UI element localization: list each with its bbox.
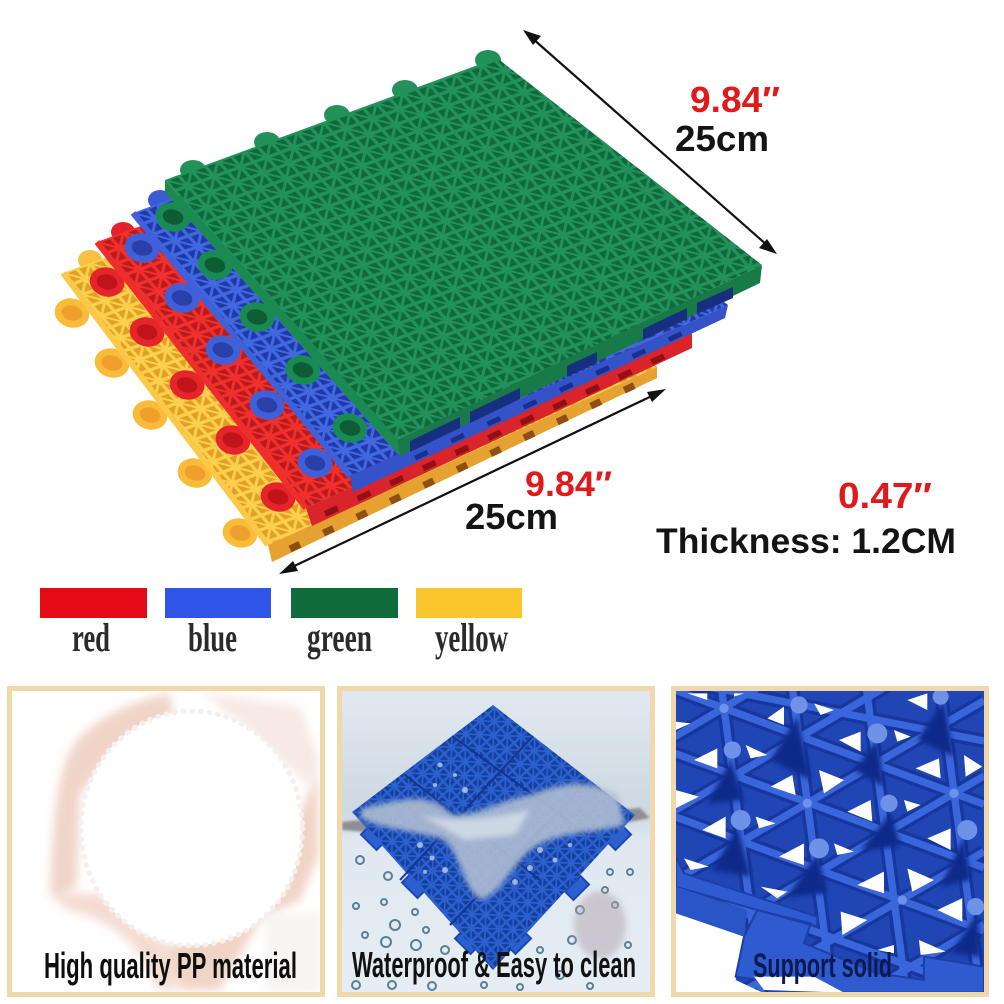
swatch: blue: blue [188, 615, 237, 660]
post caps [719, 689, 984, 915]
caption: Waterproof & Easy to clean [352, 944, 636, 985]
arrow: bottom width dimension [279, 389, 666, 574]
swatch: green [291, 588, 398, 660]
swatch: red [40, 588, 147, 660]
panel: waterproof [340, 688, 652, 994]
image: close-up of tile lattice [674, 680, 984, 993]
panel: PP material [10, 688, 322, 994]
label: thickness: Thickness: 1.2CM [656, 522, 956, 561]
product photo: stacked tiles [56, 50, 762, 562]
connector loop [676, 857, 984, 993]
swatch: yellow [416, 588, 522, 660]
image: tile under water splash [342, 705, 650, 990]
green tile [157, 50, 762, 456]
label: bottom dimension: 9.84″ [525, 465, 612, 504]
label: top dimension [675, 79, 780, 159]
caption: Support solid [753, 947, 892, 985]
swatch: blue [165, 588, 271, 660]
label: bottom dimension [465, 465, 612, 537]
panel: support structure [674, 680, 986, 994]
ribs shadow [674, 680, 984, 993]
label: bottom dimension: 25cm [465, 496, 558, 537]
label: top dimension: 25cm [675, 118, 769, 159]
yellow tile [56, 150, 657, 562]
colour legend [40, 588, 522, 660]
image: hands holding pellets [50, 693, 322, 992]
label: thickness [656, 475, 956, 561]
swatch: red: red [72, 615, 110, 660]
dark support wells [707, 700, 981, 957]
swatch: yellow: yellow [435, 615, 508, 660]
red tile [91, 120, 692, 526]
label: top dimension: 9.84″ [690, 79, 780, 120]
arrow: top width dimension [523, 30, 777, 254]
ribs [674, 680, 984, 993]
blue tile [126, 90, 728, 492]
label: thickness: 0.47″ [838, 475, 932, 516]
triangular holes [674, 693, 982, 993]
caption: High quality PP material [44, 945, 297, 986]
bubbles [352, 856, 633, 990]
swatch: green: green [307, 615, 372, 660]
